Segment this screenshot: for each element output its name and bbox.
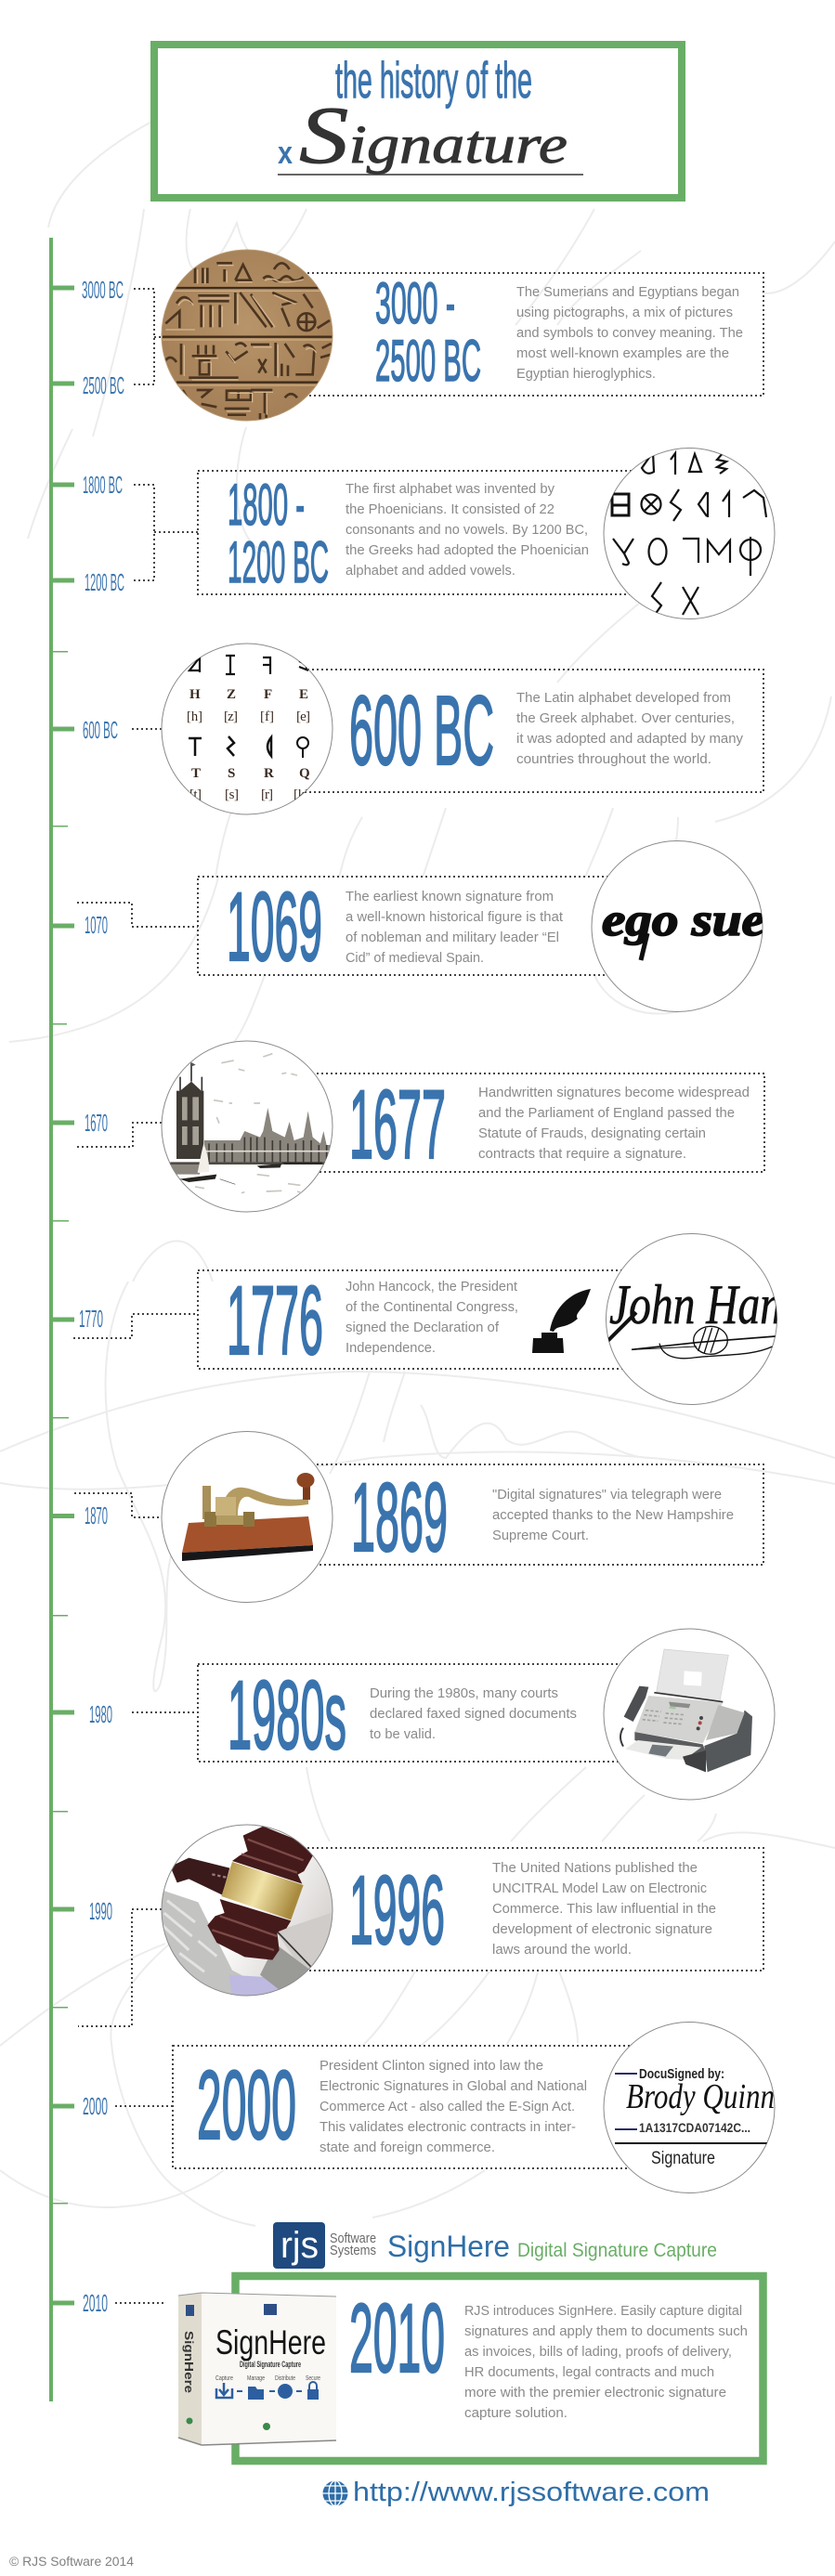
description: a well-known historical figure is that [346,910,563,925]
logo: RJS Software Systems SignHere: rjs [281,2225,319,2266]
date heading: 1800 - [228,473,305,538]
date heading [375,271,481,394]
description: signatures and apply them to documents such [464,2324,748,2339]
description [320,2059,587,2155]
description [516,691,744,767]
panel: 1800-1200 BC [132,448,775,618]
image: Greek alphabet chart: Z [227,687,236,702]
image: Greek alphabet chart: H [189,687,201,702]
image: ego sue signature [592,841,765,1012]
connector [73,1314,198,1338]
panel: 600 BC [132,644,763,814]
image: SignHere software box: Distribute [275,2375,295,2382]
website link: http://www.rjssoftware.com [353,2478,710,2507]
panel: 1980s: 1980s [228,1661,346,1770]
panel: 2010 [115,2276,763,2461]
timeline date labels: 1070 [85,911,108,939]
description: Cid” of medieval Spain. [346,951,484,966]
panel: 1869: 1869 [351,1464,448,1572]
description: declared faxed signed documents [370,1707,577,1722]
description: and the Parliament of England passed the [478,1106,735,1121]
description: the Phoenicians. It consisted of 22 [346,502,554,517]
logo: RJS Software Systems SignHere: Software [330,2231,376,2246]
image: DocuSigned signature: Brody Quinn [626,2077,775,2116]
image: telegraph key [162,1432,333,1603]
description: accepted thanks to the New Hampshire [492,1508,734,1523]
description: as invoices, bills of lading, proofs of delivery, [464,2345,732,2360]
description: contracts that require a signature. [478,1147,686,1162]
panel: 2010: 2010 [349,2284,445,2393]
description: most well-known examples are the [516,346,729,361]
icon: globe [323,2481,347,2505]
image: DocuSigned signature: 1A1317CDA07142C... [639,2120,750,2135]
text box [198,877,677,975]
text box [173,2046,689,2168]
panel: 1069 [77,841,765,1012]
timeline: green vertical axis [49,238,74,2401]
description: HR documents, legal contracts and much [464,2365,714,2380]
green frame [236,2276,763,2461]
text box [247,670,763,792]
panel: 1869 [74,1432,763,1603]
icon: quill and inkwell [532,1289,591,1353]
image: DocuSigned signature [604,2023,775,2193]
copyright: © RJS Software 2014 [9,2554,134,2569]
description: John Hancock, the President [346,1280,517,1295]
text box [247,1848,763,1971]
panel: 1776 [73,1233,782,1404]
description: The Sumerians and Egyptians began [516,285,739,300]
title: signature line: Signature [299,91,568,181]
timeline date labels [79,276,124,2317]
image: Greek alphabet chart: Q [299,766,310,781]
description [492,1488,734,1543]
connector [77,1123,162,1147]
description: the Greeks had adopted the Phoenician [346,543,589,558]
image: SignHere software box: Digital Signature Capture [240,2360,301,2369]
description [346,890,563,966]
circle outline [162,250,333,421]
image: Houses of Parliament engraving [162,1041,333,1212]
image: Greek alphabet chart: [e] [296,709,310,724]
connector [78,1909,162,2026]
panel: 2000: 2000 [197,2051,296,2160]
image: ego sue signature: ego sue [602,893,765,945]
description: During the 1980s, many courts [370,1686,558,1701]
description: The earliest known signature from [346,890,554,904]
panel: 600 BC: 600 BC [349,676,494,786]
image: hieroglyph tablet [162,250,333,421]
connector [132,728,162,730]
description [478,1086,750,1162]
image: fax machine [604,1629,775,1800]
connector [115,2302,165,2304]
description: laws around the world. [492,1943,632,1958]
image: Greek alphabet chart: [z] [224,709,238,724]
connector [77,903,198,927]
image: Greek alphabet chart: [k] [294,787,309,802]
image: John Hancock signature: John Han [609,1274,782,1335]
text box [247,1464,763,1565]
description: Commerce Act - also called the E-Sign Act. [320,2100,575,2114]
image: Greek alphabet chart: [h] [187,709,202,724]
description [464,2304,748,2421]
description: Egyptian hieroglyphics. [516,367,656,382]
description: it was adopted and adapted by many [516,732,744,747]
panel: 3000-2500 BC: 2500 BC [375,329,481,394]
description: "Digital signatures" via telegraph were [492,1488,722,1503]
description: consonants and no vowels. By 1200 BC, [346,523,588,538]
timeline date labels: 1770 [79,1305,103,1333]
description [516,285,743,382]
connector [132,289,186,384]
description: using pictographs, a mix of pictures [516,306,733,320]
image: SignHere software box [178,2293,336,2445]
text box [198,1270,691,1369]
description [346,1280,518,1356]
panel: 3000-2500 BC [132,250,763,421]
timeline date labels: 2000 [83,2092,108,2120]
panel: 1069: 1069 [227,873,322,982]
infographic: 1800 BC [83,471,123,499]
image: Greek alphabet chart: R [264,766,274,781]
image: Greek alphabet chart: [s] [225,787,239,802]
timeline date labels: 1870 [85,1502,108,1529]
logo: RJS Software Systems SignHere: SignHere [387,2230,510,2263]
image: Greek alphabet chart [162,644,333,814]
description: the Greek alphabet. Over centuries, [516,711,735,726]
image: Greek alphabet chart: F [264,687,272,702]
image: SignHere software box: SignHere [182,2331,196,2393]
infographic: 2500 BC [83,371,124,399]
description: UNCITRAL Model Law on Electronic [492,1881,707,1896]
image: John Hancock signature [606,1233,782,1404]
image: Phoenician alphabet [604,448,775,618]
text box [247,1073,764,1172]
panel: 1776: 1776 [227,1267,323,1375]
image: Greek alphabet chart: [f] [260,709,274,724]
infographic: 3000 BC [82,276,124,304]
description: alphabet and added vowels. [346,564,515,579]
description [492,1861,716,1958]
infographic: 1200 BC [85,568,124,596]
connector [132,1711,198,1713]
image: SignHere software box: SignHere [215,2323,326,2361]
description: to be valid. [370,1727,436,1742]
description: RJS introduces SignHere. Easily capture digital [464,2304,742,2319]
title: signature line: x [278,136,293,171]
description: The first alphabet was invented by [346,482,555,497]
panel: 1800-1200 BC: 1200 BC [228,530,329,595]
timeline date labels: 1980 [89,1700,112,1728]
connector [115,2105,173,2107]
description: The Latin alphabet developed from [516,691,731,706]
panel: 1996: 1996 [349,1856,445,1965]
description: development of electronic signature [492,1922,712,1937]
timeline date labels: 600 BC [83,716,118,744]
image: DocuSigned signature: Signature [651,2149,715,2168]
timeline date labels: 1670 [85,1109,108,1137]
panel: 1677: 1677 [349,1071,446,1179]
title panel [154,45,682,198]
description: Handwritten signatures become widespread [478,1086,750,1100]
image: Greek alphabet chart: E [299,687,308,702]
description: Independence. [346,1341,436,1356]
logo: RJS Software Systems SignHere: Digital Signature Capture [517,2240,717,2261]
description: and symbols to convey meaning. The [516,326,743,341]
description: Statute of Frauds, designating certain [478,1126,706,1141]
panel: 1980s [132,1629,775,1800]
connector [74,1493,161,1517]
title: the history of the: the history of the [335,51,532,109]
description: Supreme Court. [492,1529,589,1543]
image: Greek alphabet chart: T [191,766,201,781]
description: President Clinton signed into law the [320,2059,543,2074]
description: This validates electronic contracts in inter- [320,2120,576,2135]
image: DocuSigned signature: DocuSigned by: [639,2066,724,2082]
description: The United Nations published the [492,1861,698,1876]
description: countries throughout the world. [516,752,711,767]
description: Electronic Signatures in Global and National [320,2079,587,2094]
description: signed the Declaration of [346,1321,500,1335]
timeline date labels: 2010 [83,2289,108,2317]
image: Greek alphabet chart: [r] [261,787,273,802]
description: state and foreign commerce. [320,2140,495,2155]
image: Greek alphabet chart: [t] [189,787,202,802]
text box [198,471,689,594]
description: of nobleman and military leader “El [346,930,559,945]
date heading: 3000 - [375,271,455,336]
description [370,1686,577,1742]
logo: RJS Software Systems SignHere [273,2222,717,2269]
text box [198,1664,689,1762]
panel: 2000 [115,2023,775,2193]
panel: 1677 [77,1041,764,1212]
description: more with the premier electronic signature [464,2386,726,2400]
text box [247,273,763,396]
image: gavel on keyboard [158,1825,333,1998]
logo: RJS Software Systems SignHere: Systems [330,2243,376,2258]
image: Greek alphabet chart: S [228,766,235,781]
timeline date labels: 1990 [89,1897,112,1925]
timeline: major ticks [53,286,74,2305]
connector [132,485,198,580]
description: capture solution. [464,2406,568,2421]
description: of the Continental Congress, [346,1300,518,1315]
image: SignHere software box: Secure [306,2375,320,2382]
date heading [228,473,329,595]
panel: 1996 [78,1825,763,2026]
description [346,482,589,579]
description: Commerce. This law influential in the [492,1902,716,1917]
image: SignHere software box: Manage [247,2375,265,2382]
image: SignHere software box: Capture [215,2375,233,2382]
